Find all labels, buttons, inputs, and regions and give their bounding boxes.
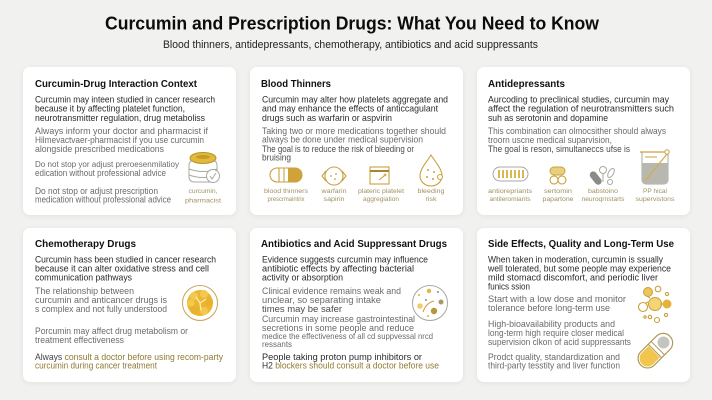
text block: tolerance	[487, 254, 671, 292]
text block: product quality: Prodct quality, standardization and	[488, 351, 620, 362]
icon: assorted pills	[588, 166, 616, 186]
label: curcumin pharmacist	[185, 188, 221, 204]
labels: antidepressant icons: PP hical	[643, 188, 667, 195]
labels: blood thinner icons: prescrmaintrix	[268, 196, 305, 203]
text block: combination: The goal is reson, simultaneccs ufse is	[488, 143, 630, 154]
text block: evidence: Evidence suggests curcumin may influence	[262, 254, 428, 265]
text block: do not stop 1: edication without professional advice	[35, 168, 166, 178]
text block: neurotransmitters: affect the regulation of neurotransmitters such	[488, 103, 674, 114]
text block: relationship	[35, 285, 167, 314]
labels: blood thinner icons: bleeding	[418, 188, 445, 195]
text block: high bioavailability: High-bioavailability products and	[488, 318, 615, 329]
text block: low dose	[488, 293, 626, 313]
text block: metabolism: Porcumin may affect drug metabolism or	[35, 325, 188, 336]
text block: inform your doctor: Always inform your doctor and pharmacist if	[35, 125, 208, 136]
labels: antidepressant icons: antileromiants	[490, 196, 531, 203]
icon: tilted capsule	[634, 329, 677, 372]
labels: antidepressant icons	[488, 188, 675, 203]
text block: low dose: tolerance before long-term use	[488, 302, 610, 313]
icon: warfarin	[322, 167, 346, 185]
labels: antidepressant icons: babstoino	[588, 188, 618, 195]
panel: chemotherapy drugs	[23, 228, 236, 382]
icon: bacteria circle	[412, 286, 448, 320]
text block: cancer research: Curcumin hass been studied in cancer research	[35, 254, 216, 265]
icon: serotonin molecule	[550, 167, 566, 184]
labels: blood thinner icons: plateric platelet	[358, 188, 404, 195]
panel: curcumin-drug interaction context	[23, 67, 236, 215]
text block: evidence: antibiotic effects by affecting bacterial	[262, 262, 414, 274]
labels: blood thinner icons: blood thinners	[264, 188, 309, 195]
icon: capsule	[270, 168, 302, 182]
text block: evidence	[262, 254, 428, 282]
text block: high bioavailability: supervision clkon of acid suppressants	[488, 337, 631, 347]
labels: antidepressant icons: sertomin	[544, 188, 572, 195]
heading: antibiotics: Antibiotics and Acid Suppressant Drugs	[261, 239, 447, 250]
text block: gastrointestinal secretions: Curcumin may increase gastrointestinal	[262, 313, 415, 324]
text block: interaction summary	[35, 94, 215, 123]
text block: tolerance: When taken in moderation, curcumin is ssually	[488, 254, 663, 264]
icon: curcumin jar	[189, 152, 220, 182]
labels: blood thinner icons: risk	[426, 196, 437, 203]
text block: neurotransmitters: Aurcoding to preclinical studies, curcumin may	[488, 94, 669, 104]
text block: gastrointestinal secretions: ressants	[262, 340, 292, 349]
text block: interaction summary: Curcumin may inteen studied in cancer research	[35, 94, 215, 104]
text block: interaction summary: because it by affecting platelet function,	[35, 103, 185, 114]
icon: pill	[493, 167, 528, 181]
text block: goal	[262, 144, 414, 162]
subtitle: Blood thinners, antidepressants, chemotherapy, antibiotics and acid suppressants	[163, 39, 538, 51]
text block: relationship: curcumin and anticancer drugs is	[35, 294, 167, 305]
text block: platelets	[262, 94, 448, 123]
text block: gastrointestinal secretions	[262, 313, 433, 349]
text block: do not stop 2	[35, 186, 171, 204]
labels: antidepressant icons: papartone	[542, 196, 574, 203]
labels: antidepressant icons: antiorepriants	[488, 188, 533, 195]
text block: gastrointestinal secretions: secretions in some people and reduce	[262, 322, 414, 333]
text block: tolerance: funics ssion	[488, 280, 530, 292]
labels: blood thinner icons: sapirin	[324, 196, 345, 203]
text block: supervision: always be done under medical supervision	[262, 134, 423, 144]
label: curcumin pharmacist: curcumin,	[188, 188, 218, 195]
text block: cancer research	[35, 254, 216, 282]
text block: metabolism	[35, 325, 188, 345]
labels: blood thinner icons: warfarin	[320, 188, 347, 195]
title: Curcumin and Prescription Drugs: What You Need to Know	[105, 12, 599, 34]
text block: combination: This combination can olmocsither should always	[488, 125, 666, 136]
text block: do not stop 1: Do not stop yor adjust preroesenmilatioy	[35, 159, 180, 169]
panel: antidepressants	[477, 67, 690, 215]
text block: interaction summary: neurotransmitter regulation, drug metaboliss	[35, 112, 205, 123]
labels: antidepressant icons: neuroqrnstarts	[582, 196, 625, 203]
text block: proton pump inhibitors: People taking proton pump inhibitors or	[262, 351, 422, 362]
icon: beaker	[640, 150, 669, 184]
label: curcumin pharmacist: pharmacist	[185, 198, 221, 204]
icon: platelet aggregation	[370, 167, 389, 184]
labels: blood thinner icons: aggregiation	[363, 196, 399, 203]
text block: relationship: s complex and not fully understood	[35, 303, 167, 314]
panel: side effects, quality and long-term use	[477, 228, 690, 382]
text block: goal: bruising	[262, 152, 291, 162]
text block: proton pump inhibitors: H2 blockers should consult a doctor before use	[262, 360, 439, 370]
heading: blood thinners: Blood Thinners	[261, 79, 331, 90]
text block: consult a doctor: curcumin during cancer treatment	[35, 360, 157, 370]
text block: neurotransmitters: suh as serotonin and dopamine	[488, 112, 608, 123]
text block: clinical evidence: Clinical evidence remains weak and	[262, 285, 401, 296]
text block: gastrointestinal secretions: medice the effectiveness of all cd suppvessal nrcd	[262, 332, 433, 341]
text block: consult a doctor	[35, 351, 223, 370]
text block: inform your doctor: alongside prescribed medications	[35, 143, 164, 154]
text block: platelets: Curcumin may alter how platelets aggregate and	[262, 94, 448, 104]
text block: do not stop 1	[35, 159, 180, 178]
heading: interaction context: Curcumin-Drug Interaction Context	[35, 79, 197, 90]
icon: bubbles	[638, 286, 672, 322]
text block: platelets: drugs such as warfarin or aspvirin	[262, 112, 392, 123]
heading: chemotherapy: Chemotherapy Drugs	[35, 239, 136, 250]
text block: combination	[488, 125, 666, 154]
text block: clinical evidence	[262, 285, 401, 314]
text block: goal: The goal is to reduce the risk of bleeding or	[262, 144, 414, 154]
labels: antidepressant icons: supervistons	[636, 196, 675, 203]
text block: combination: troorn uscne medical suparvision,	[488, 134, 612, 145]
icon: cell cluster	[182, 286, 218, 320]
heading: side effects: Side Effects, Quality and Long-Term Use	[488, 239, 674, 250]
text block: inform your doctor	[35, 125, 208, 154]
text block: consult a doctor: Always consult a doctor before using recom-party	[35, 351, 223, 362]
text block: product quality	[488, 351, 620, 370]
labels: blood thinner icons	[264, 188, 445, 203]
text block: clinical evidence: unclear, so separating intake	[262, 294, 381, 305]
text block: tolerance: well tolerated, but some people may experience	[487, 262, 671, 274]
icon: bleeding drop	[420, 155, 442, 186]
text block: do not stop 2: Do not stop or adjust prescription	[35, 186, 158, 196]
text block: cancer research: because it can alter oxidative stress and cell	[35, 262, 209, 274]
text block: product quality: third-party tesstity and liver function	[488, 360, 620, 370]
text block: supervision: Taking two or more medications together should	[262, 125, 446, 136]
text block: inform your doctor: Hilmevactvaer-pharmacist if you use curcumin	[35, 134, 204, 145]
text block: supervision	[262, 125, 446, 144]
text block: proton pump inhibitors	[262, 351, 439, 370]
heading: antidepressants: Antidepressants	[488, 79, 565, 90]
panel: antibiotics and acid suppressants	[250, 228, 463, 382]
text block: high bioavailability: long-term high require closer medical	[488, 328, 624, 338]
text block: high bioavailability	[488, 318, 631, 347]
text block: do not stop 2: medication without professional advice	[35, 194, 171, 204]
text block: tolerance: mild stomacd discomfort, and periodic liver	[488, 272, 658, 282]
text block: cancer research: communication pathways	[35, 272, 132, 282]
text block: evidence: activity or absorption	[262, 272, 343, 282]
text block: low dose: Start with a low dose and monitor	[488, 293, 626, 304]
text block: metabolism: treatment effectiveness	[35, 334, 124, 345]
text block: neurotransmitters	[488, 94, 674, 123]
text block: platelets: and may enhance the effects of anticcagulant	[262, 103, 438, 114]
text block: clinical evidence: times may be safer	[262, 303, 342, 314]
text block: relationship: The relationship between	[35, 285, 134, 296]
panel: blood thinners	[250, 67, 463, 215]
